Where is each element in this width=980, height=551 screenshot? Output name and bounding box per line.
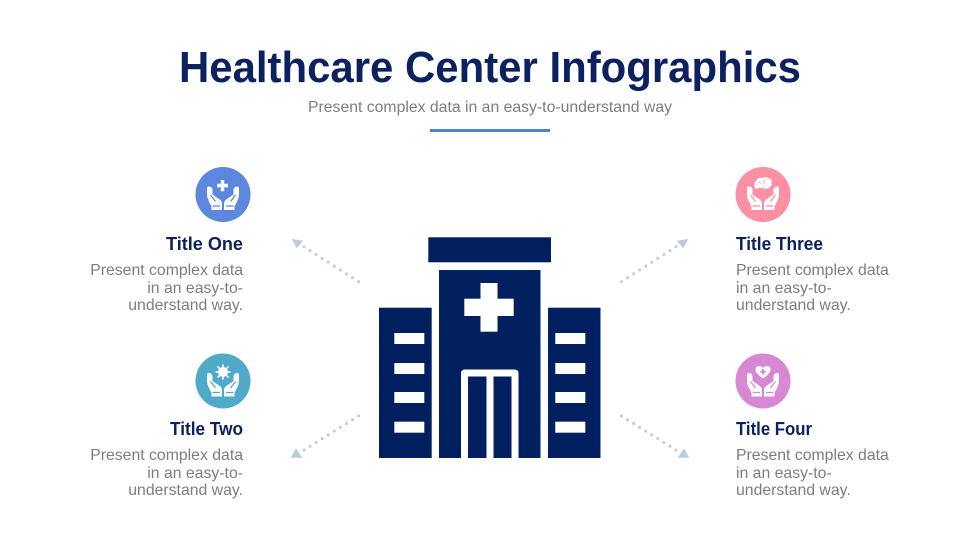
text block: Title One description: [90, 262, 243, 314]
central hospital building icon: [379, 237, 600, 458]
text block: Title Four description: [736, 447, 889, 499]
title: Healthcare Center Infographics: [179, 43, 801, 92]
text block: Title Two description: [90, 447, 243, 499]
text block: Title Two description: in an easy-to-: [147, 465, 243, 482]
arrow: bottom left: [291, 416, 359, 458]
text block: Title Four description: Present complex data: [736, 447, 889, 464]
text block: Title One description: Present complex data: [90, 262, 243, 279]
icon: hands with medical cross: [196, 167, 250, 222]
icon: hands with brain: [736, 167, 790, 222]
text block: Title Four description: understand way.: [736, 482, 851, 499]
text block: Title Three description: in an easy-to-: [736, 280, 832, 297]
text block: Title Four description: in an easy-to-: [736, 465, 832, 482]
text block: Title Three description: Present complex data: [736, 262, 889, 279]
arrow: top left: [292, 239, 359, 282]
text block: Title Three description: [736, 262, 889, 314]
heading: Title One: Title One: [166, 233, 243, 254]
title underline: [430, 129, 550, 132]
heading: Title Three: Title Three: [736, 233, 823, 254]
heading: Title Two: Title Two: [170, 418, 243, 439]
arrow: bottom right: [621, 416, 689, 458]
text block: Title One description: understand way.: [128, 297, 243, 314]
text block: Title Two description: understand way.: [128, 482, 243, 499]
icon: hands with virus: [196, 354, 250, 408]
arrow: top right: [621, 239, 688, 282]
icon: hands with heart: [736, 354, 790, 408]
subtitle: Present complex data in an easy-to-understand way: [308, 99, 672, 116]
text block: Title Three description: understand way.: [736, 297, 851, 314]
heading: Title Four: Title Four: [736, 418, 812, 439]
text block: Title One description: in an easy-to-: [147, 280, 243, 297]
text block: Title Two description: Present complex data: [90, 447, 243, 464]
